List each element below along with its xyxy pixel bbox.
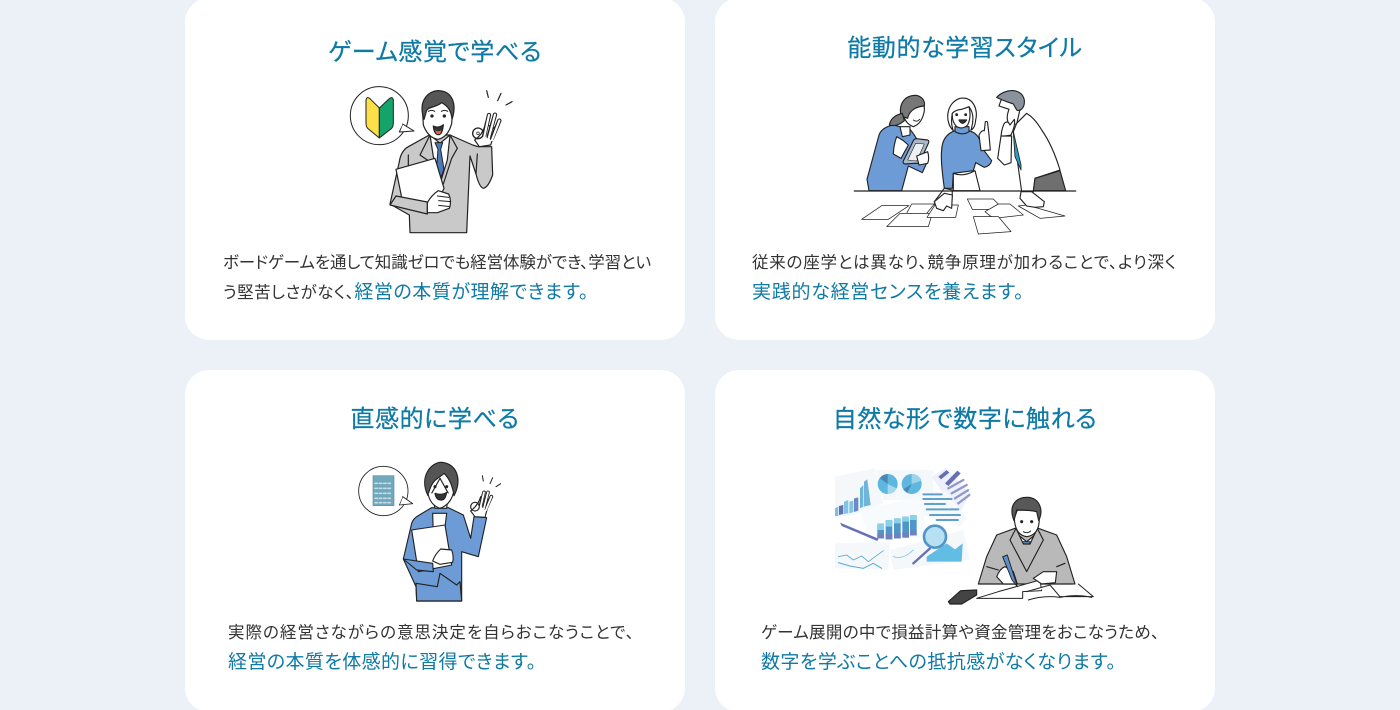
heading: ゲーム感覚で学べる — [328, 39, 542, 66]
heading: 自然な形で数字に触れる — [833, 406, 1097, 433]
body text with highlight: 数字を学ぶことへの抵抗感がなくなります。 — [761, 652, 1116, 673]
body text: 従来の座学とは異なり、競争原理が加わることで、より深く — [752, 254, 1177, 272]
heading: 直感的に学べる — [351, 406, 519, 433]
body text: 実際の経営さながらの意思決定を自らおこなうことで、 — [228, 624, 635, 642]
body text with highlight: 経営の本質を体感的に習得できます。 — [228, 652, 536, 673]
body text with highlight: う堅苦しさがなく、経営の本質が理解できます。 — [223, 282, 589, 303]
illustration: man writing with charts — [835, 468, 1094, 605]
panel: active learning style — [715, 0, 1215, 340]
panel: natural contact with numbers — [715, 370, 1215, 710]
body text: ボードゲームを通して知識ゼロでも経営体験ができ、学習とい — [223, 254, 651, 272]
illustration: three people around a table — [854, 90, 1076, 234]
heading: 能動的な学習スタイル — [847, 35, 1083, 62]
illustration: businessman with beginner mark — [350, 86, 513, 234]
panel: intuitive learning — [185, 370, 685, 710]
body text with highlight: 実践的な経営センスを養えます。 — [752, 282, 1024, 303]
body text: ゲーム展開の中で損益計算や資金管理をおこなうため、 — [761, 624, 1160, 642]
illustration: businesswoman with calculator — [358, 462, 502, 602]
panel: game-like learning — [185, 0, 685, 340]
